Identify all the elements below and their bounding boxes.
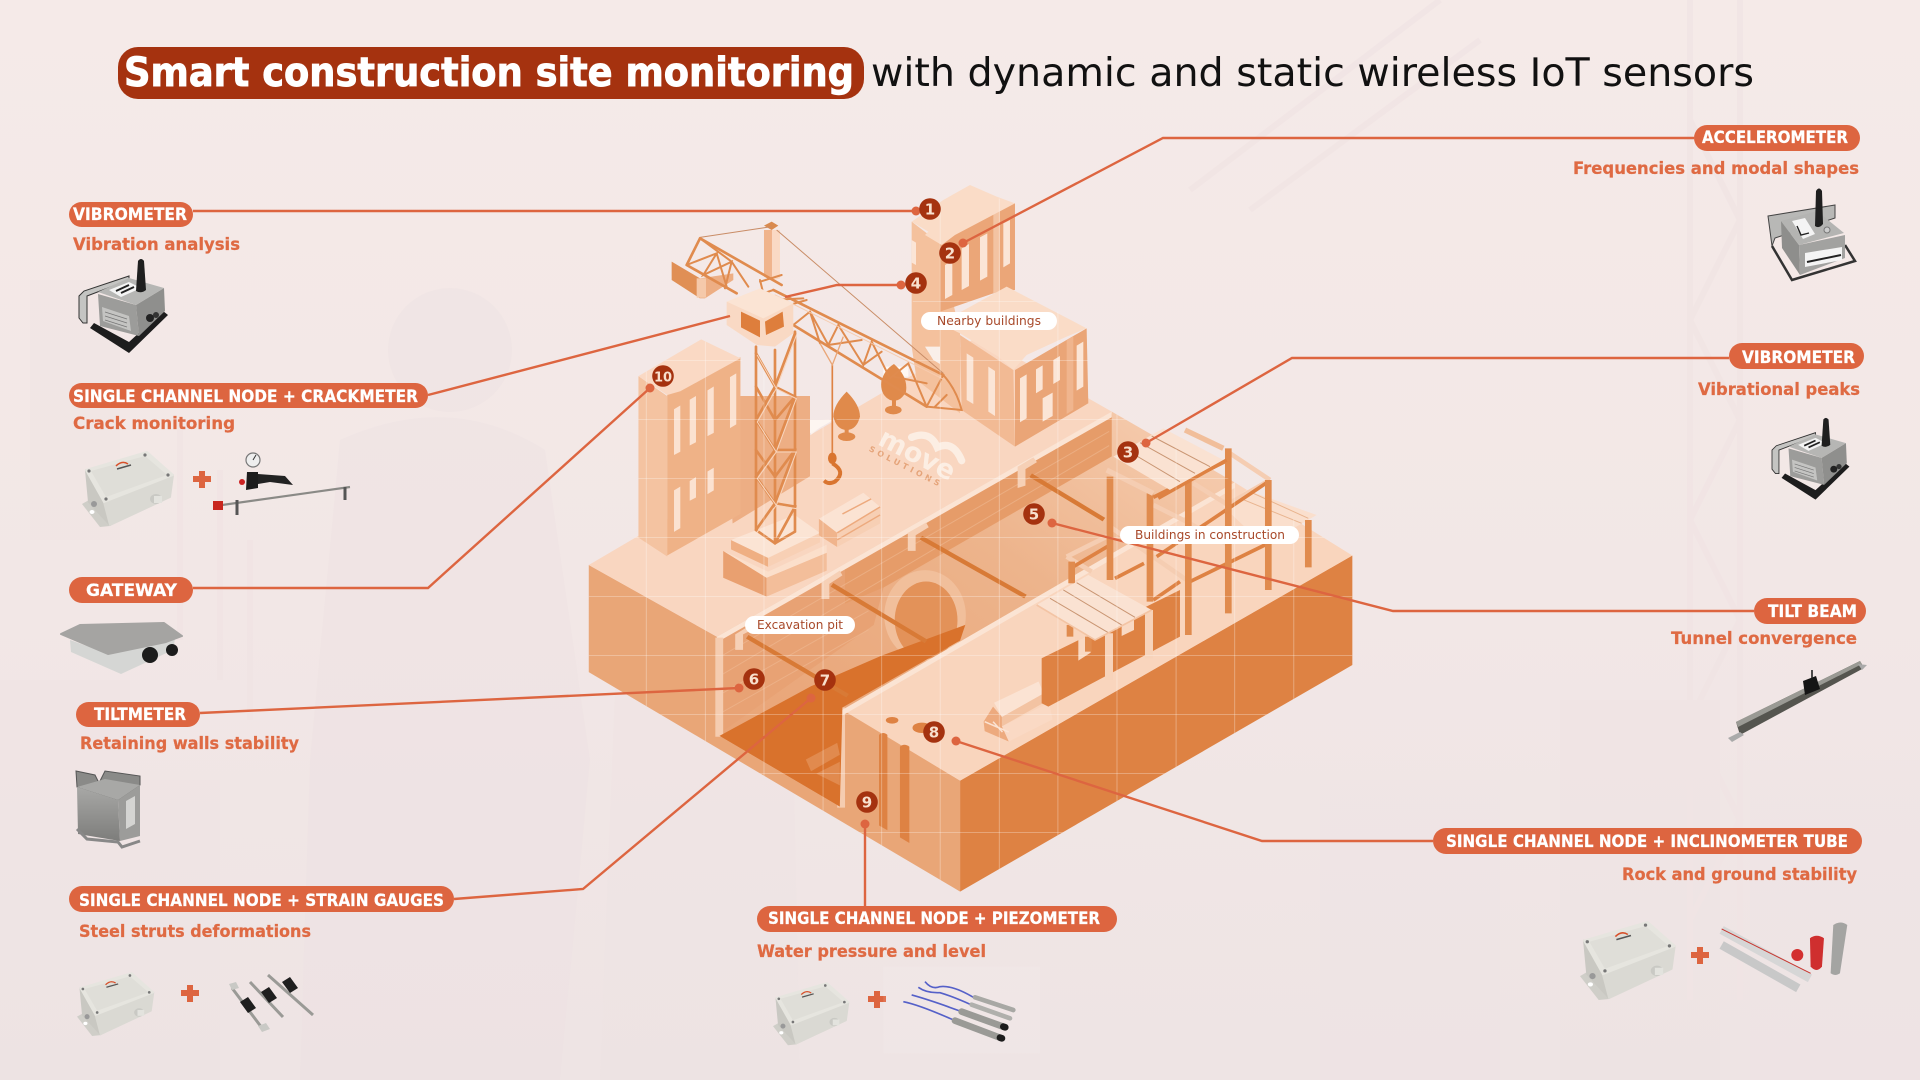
label <box>1754 598 1866 624</box>
description: Frequencies and modal shapes <box>1573 159 1859 179</box>
label: SINGLE CHANNEL NODE + PIEZOMETER <box>768 909 1100 928</box>
marker 1 <box>912 198 941 220</box>
logo: move <box>873 423 961 487</box>
tag: nearby buildings: Nearby buildings <box>937 313 1041 328</box>
marker 1: 1 <box>925 200 935 218</box>
marker 8 <box>923 721 960 746</box>
icon: inclinometer tubes <box>1722 922 1847 988</box>
excavation pit <box>715 412 1235 808</box>
marker 4: 4 <box>911 274 921 292</box>
marker 5 <box>1023 503 1056 528</box>
tree front <box>833 392 860 441</box>
label <box>1694 125 1860 151</box>
panel: vibrometer left <box>69 202 240 353</box>
lumber stack centre <box>819 493 880 547</box>
icon: vibrometer <box>1772 418 1849 500</box>
upper deck <box>1107 428 1227 498</box>
panel: tilt beam <box>1671 598 1867 742</box>
panel: inclinometer <box>1433 828 1862 1000</box>
marker 10 <box>646 365 674 392</box>
marker 8: 8 <box>929 724 939 742</box>
icon: node <box>1580 922 1675 1000</box>
icon: strain gauges <box>229 975 313 1032</box>
icon: tilt beam <box>1728 661 1867 742</box>
orange beams <box>1073 460 1268 600</box>
hook <box>820 337 843 483</box>
label: VIBROMETER <box>1742 348 1855 367</box>
platform gap <box>810 420 833 433</box>
marker 9 <box>856 791 878 828</box>
panel: tiltmeter <box>76 702 299 847</box>
description: Rock and ground stability <box>1622 865 1857 885</box>
trees, logo and crane <box>672 222 962 543</box>
marker 6 <box>734 668 765 692</box>
description: Vibration analysis <box>73 235 240 255</box>
crane base <box>723 515 827 597</box>
white gap behind crane <box>811 420 829 435</box>
marker 2 <box>939 238 968 264</box>
icon: gateway <box>61 623 182 674</box>
icon: accelerometer <box>1768 188 1855 280</box>
label: SINGLE CHANNEL NODE + STRAIN GAUGES <box>79 891 444 910</box>
label: VIBROMETER <box>73 205 187 224</box>
marker 2: 2 <box>945 244 955 262</box>
isometric ground block and excavation <box>589 336 1352 892</box>
building: gateway tower <box>638 339 810 556</box>
icon: tiltmeter <box>76 771 140 847</box>
label <box>69 886 454 912</box>
marker 7: 7 <box>820 672 830 690</box>
front columns <box>1109 610 1149 680</box>
steel struts <box>747 475 1104 696</box>
plus <box>193 471 211 488</box>
marker 9: 9 <box>862 794 872 812</box>
title <box>118 47 1754 99</box>
panel: gateway <box>61 577 193 674</box>
icon: node <box>773 983 849 1045</box>
label: TILT BEAM <box>1768 602 1857 621</box>
description: Retaining walls stability <box>80 734 299 754</box>
building under construction <box>1037 428 1317 707</box>
grid overlay <box>589 198 1352 880</box>
boreholes with piezometers <box>879 717 931 843</box>
stay cables <box>700 227 943 373</box>
crane cab <box>727 288 793 347</box>
icon: piezometers <box>883 967 1040 1053</box>
description: Steel struts deformations <box>79 922 311 942</box>
columns <box>1070 448 1308 652</box>
crane tower lattice <box>756 332 796 543</box>
icon: node <box>82 452 173 527</box>
crane mast top <box>764 222 780 281</box>
title remainder: with dynamic and static wireless IoT sensors <box>871 51 1754 96</box>
crane counterweight <box>672 262 733 298</box>
label <box>757 906 1117 932</box>
tag: excavation pit <box>745 616 855 634</box>
marker 4 <box>896 272 927 294</box>
plus <box>868 991 886 1008</box>
marker 3: 3 <box>1123 444 1133 462</box>
label <box>1433 828 1862 854</box>
front deck <box>1037 575 1152 640</box>
building: front nearby <box>940 287 1088 447</box>
panel: crackmeter <box>69 383 428 527</box>
jib truss <box>763 290 962 410</box>
label <box>76 702 200 727</box>
tunnel <box>884 570 966 661</box>
icon: vibrometer <box>79 259 168 353</box>
label: GATEWAY <box>86 581 178 600</box>
panel: strain gauges <box>69 886 454 1036</box>
tag: excavation pit: Excavation pit <box>757 617 843 632</box>
wall openings <box>1078 617 1134 661</box>
building: tall nearby <box>912 185 1015 413</box>
plus <box>1691 947 1709 964</box>
description: Crack monitoring <box>73 414 235 434</box>
tree rear <box>881 364 908 414</box>
label: ACCELEROMETER <box>1702 128 1848 147</box>
lumber stack front <box>984 682 1053 742</box>
marker 10: 10 <box>654 370 672 386</box>
panel: piezometer <box>757 906 1117 1053</box>
title highlight: Smart construction site monitoring <box>124 50 854 96</box>
marker 5: 5 <box>1029 506 1039 524</box>
marker 3 <box>1117 438 1150 463</box>
counter jib truss <box>687 238 782 293</box>
panel: accelerometer <box>1573 125 1860 280</box>
marker 6: 6 <box>749 670 759 688</box>
pale beams <box>1067 453 1270 580</box>
ground block <box>589 336 1352 892</box>
logo: SOLUTIONS <box>867 444 941 488</box>
pit floor <box>720 625 965 807</box>
leader lines <box>193 138 1754 906</box>
marker 7 <box>806 669 836 702</box>
plus <box>181 985 199 1002</box>
label: SINGLE CHANNEL NODE + CRACKMETER <box>73 387 418 406</box>
icon: node <box>77 973 153 1036</box>
description: Water pressure and level <box>757 942 986 962</box>
label: TILTMETER <box>94 705 186 724</box>
description: Tunnel convergence <box>1671 629 1857 649</box>
panel: vibrometer right <box>1698 343 1864 500</box>
rear deck <box>1223 490 1317 535</box>
tag: nearby buildings <box>921 312 1057 330</box>
icon: crackmeter <box>213 453 350 515</box>
label <box>1729 343 1864 369</box>
label: SINGLE CHANNEL NODE + INCLINOMETER TUBE <box>1446 832 1848 851</box>
tag: buildings in construction: Buildings in construction <box>1135 527 1285 542</box>
description: Vibrational peaks <box>1698 380 1860 400</box>
low wall <box>1042 590 1180 707</box>
sensor location markers <box>646 198 1150 828</box>
